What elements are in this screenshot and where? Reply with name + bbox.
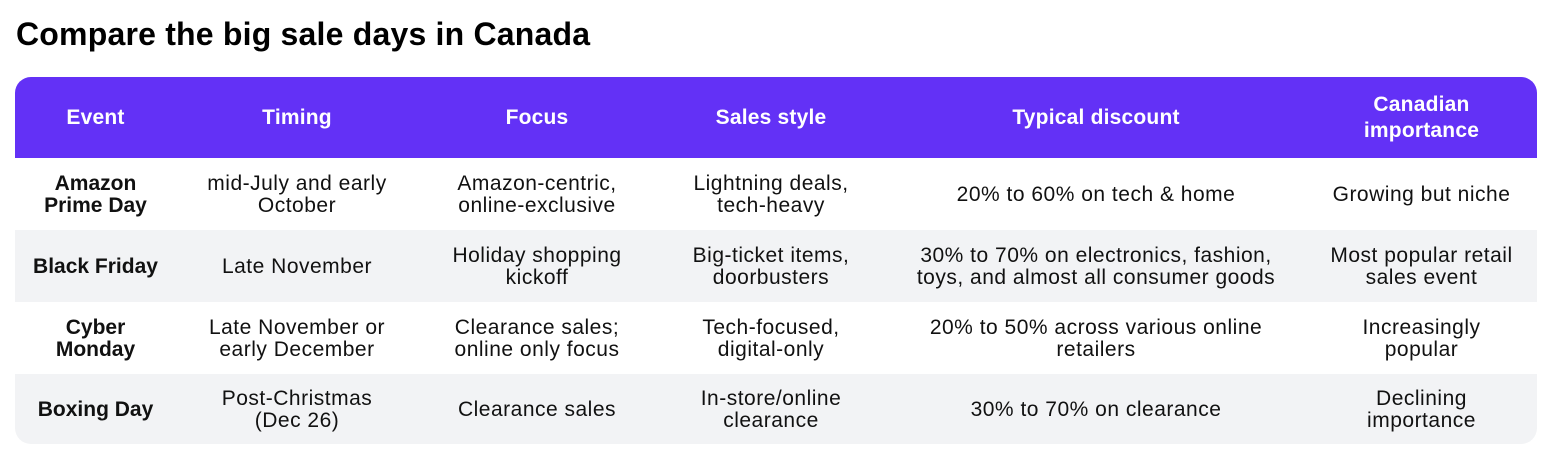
header row: Canadian [1373, 92, 1470, 116]
row: Amazon Prime Day: Amazon-centric, [457, 172, 617, 195]
row: Black Friday: Big-ticket items, [693, 244, 849, 267]
row: Cyber Monday: retailers [1056, 338, 1136, 361]
row: Boxing Day: Declining [1376, 387, 1467, 410]
row: Boxing Day: In-store/online [701, 387, 841, 410]
row: Boxing Day: Clearance sales [458, 398, 616, 421]
row: Black Friday: kickoff [506, 266, 568, 289]
row: Cyber Monday: Tech-focused, [702, 316, 840, 339]
row: Amazon Prime Day: mid-July and early [207, 172, 387, 195]
header row: Event [66, 106, 125, 128]
row: Cyber Monday: early December [219, 338, 375, 361]
row: Black Friday [15, 230, 1537, 302]
row: Boxing Day: clearance [723, 409, 819, 432]
row: Black Friday: Late November [222, 255, 372, 278]
row: Cyber Monday: digital-only [718, 338, 824, 361]
title: Compare the big sale days in Canada [16, 16, 590, 52]
row: Cyber Monday: Cyber [66, 316, 125, 339]
row: Boxing Day [15, 374, 1537, 444]
row: Black Friday: Most popular retail [1330, 244, 1513, 267]
row: Boxing Day: 30% to 70% on clearance [971, 398, 1221, 421]
table [15, 77, 1537, 444]
row: Cyber Monday: 20% to 50% across various online [930, 316, 1262, 339]
row: Cyber Monday: Clearance sales; [455, 316, 619, 339]
row: Amazon Prime Day: Growing but niche [1333, 183, 1510, 206]
row: Amazon Prime Day: Prime Day [44, 194, 147, 217]
row: Black Friday: Holiday shopping [452, 244, 622, 267]
row: Amazon Prime Day [44, 172, 1510, 217]
header row: Timing [262, 106, 332, 128]
header row: importance [1364, 118, 1479, 142]
header row: Typical discount [1012, 106, 1180, 128]
row: Boxing Day: (Dec 26) [255, 409, 339, 432]
row: Boxing Day: Post-Christmas [222, 387, 372, 410]
row: Amazon Prime Day: Lightning deals, [693, 172, 849, 195]
header row: Focus [506, 106, 568, 128]
row: Amazon Prime Day: tech-heavy [717, 194, 825, 217]
row: Cyber Monday: online only focus [455, 338, 619, 361]
header row: Sales style [716, 106, 826, 128]
row: Cyber Monday: popular [1385, 338, 1458, 361]
row: Black Friday: Black Friday [33, 255, 158, 278]
header row [15, 77, 1537, 158]
row: Black Friday: sales event [1366, 266, 1477, 289]
row: Cyber Monday: Increasingly [1362, 316, 1481, 339]
row: Cyber Monday [56, 316, 1481, 361]
row: Amazon Prime Day: 20% to 60% on tech & home [957, 183, 1235, 206]
row: Boxing Day: Boxing Day [38, 398, 153, 421]
row: Amazon Prime Day: Amazon [55, 172, 136, 195]
row: Boxing Day: importance [1367, 409, 1476, 432]
row: Amazon Prime Day: online-exclusive [458, 194, 616, 217]
row: Cyber Monday: Monday [56, 338, 135, 361]
row: Black Friday: doorbusters [713, 266, 829, 289]
row: Black Friday: 30% to 70% on electronics, fashion, [920, 244, 1272, 267]
row: Amazon Prime Day: October [258, 194, 336, 217]
row: Cyber Monday: Late November or [209, 316, 385, 339]
row: Black Friday: toys, and almost all consumer goods [917, 266, 1275, 289]
